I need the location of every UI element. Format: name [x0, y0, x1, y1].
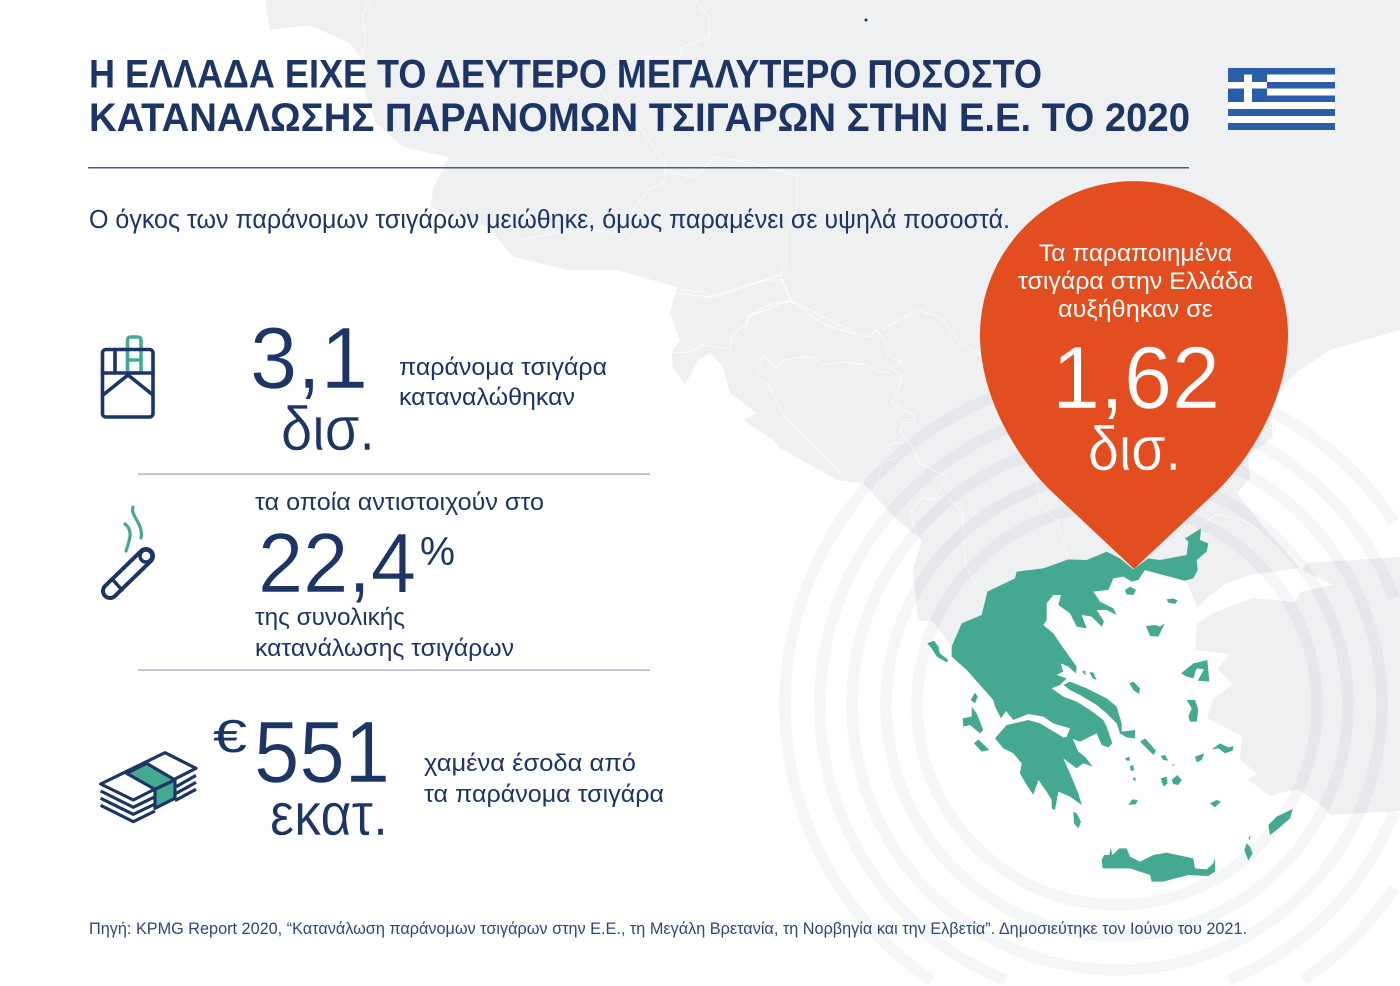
text: lost revenue — [424, 750, 664, 808]
text: lost revenue: χαμένα έσοδα από — [424, 750, 636, 777]
text: illegal cigarettes consumed — [399, 354, 607, 411]
callout: map pin with counterfeit figure — [980, 181, 1288, 569]
background map of the Balkans and Turkey — [265, 0, 1400, 815]
small dot — [864, 18, 868, 22]
callout: map pin with counterfeit figure: 1,62 — [1052, 328, 1220, 427]
subtitle: Ο όγκος των παράνομων τσιγάρων μειώθηκε, όμως παραμένει σε υψηλά ποσοστά. — [89, 206, 1010, 234]
title divider — [88, 167, 1189, 168]
text: illegal cigarettes consumed: καταναλώθηκαν — [399, 384, 575, 411]
stat: 22.4 percent: της συνολικής — [255, 604, 405, 631]
icon: Greek flag — [1228, 68, 1335, 130]
callout: map pin with counterfeit figure: αυξήθηκαν σε — [1058, 296, 1213, 323]
text: lost revenue: τα παράνομα τσιγάρα — [424, 781, 664, 808]
title: Η ΕΛΛΑΔΑ ΕΙΧΕ ΤΟ ΔΕΥΤΕΡΟ ΜΕΓΑΛΥΤΕΡΟ ΠΟΣΟΣΤΟ — [89, 52, 1042, 96]
stat: 551 million euro — [213, 704, 390, 848]
concentric radar rings — [785, 373, 1394, 980]
callout: map pin with counterfeit figure: δισ. — [1088, 415, 1181, 484]
text: illegal cigarettes consumed: παράνομα τσιγάρα — [399, 354, 607, 381]
stat: 551 million euro: € — [213, 710, 247, 762]
icon: burning cigarette — [110, 507, 152, 591]
stat: 22.4 percent: % — [420, 530, 455, 574]
map of Greece — [927, 528, 1293, 882]
callout: map pin with counterfeit figure: τσιγάρα στην Ελλάδα — [1018, 268, 1253, 295]
stat: 22.4 percent — [255, 489, 544, 662]
stat: 22.4 percent: 22,4 — [258, 516, 416, 610]
stat: 551 million euro: 551 — [254, 704, 390, 801]
stat: 22.4 percent: κατανάλωσης τσιγάρων — [255, 635, 514, 662]
stat: 3.1 billion: 3,1 — [250, 310, 368, 407]
divider two — [138, 670, 650, 671]
stat: 22.4 percent: τα οποία αντιστοιχούν στο — [255, 489, 544, 516]
stat: 3.1 billion — [250, 310, 375, 464]
stat: 3.1 billion: δισ. — [281, 395, 375, 464]
icon: cigarette pack — [102, 337, 153, 417]
divider one — [138, 474, 650, 475]
icon: banknote stack — [101, 753, 196, 822]
source footnote: Πηγή: KPMG Report 2020, “Κατανάλωση παράνομων τσιγάρων στην Ε.Ε., τη Μεγάλη Βρετανία, τη Νορβηγία και την Ελβετία”. Δημοσιεύτηκε τον Ιούνιο του 2021. — [89, 920, 1247, 938]
stat: 551 million euro: εκατ. — [270, 781, 388, 848]
title — [89, 52, 1190, 140]
title: ΚΑΤΑΝΑΛΩΣΗΣ ΠΑΡΑΝΟΜΩΝ ΤΣΙΓΑΡΩΝ ΣΤΗΝ Ε.Ε. ΤΟ 2020 — [89, 96, 1190, 140]
callout: map pin with counterfeit figure: Τα παραποιημένα — [1039, 240, 1232, 267]
